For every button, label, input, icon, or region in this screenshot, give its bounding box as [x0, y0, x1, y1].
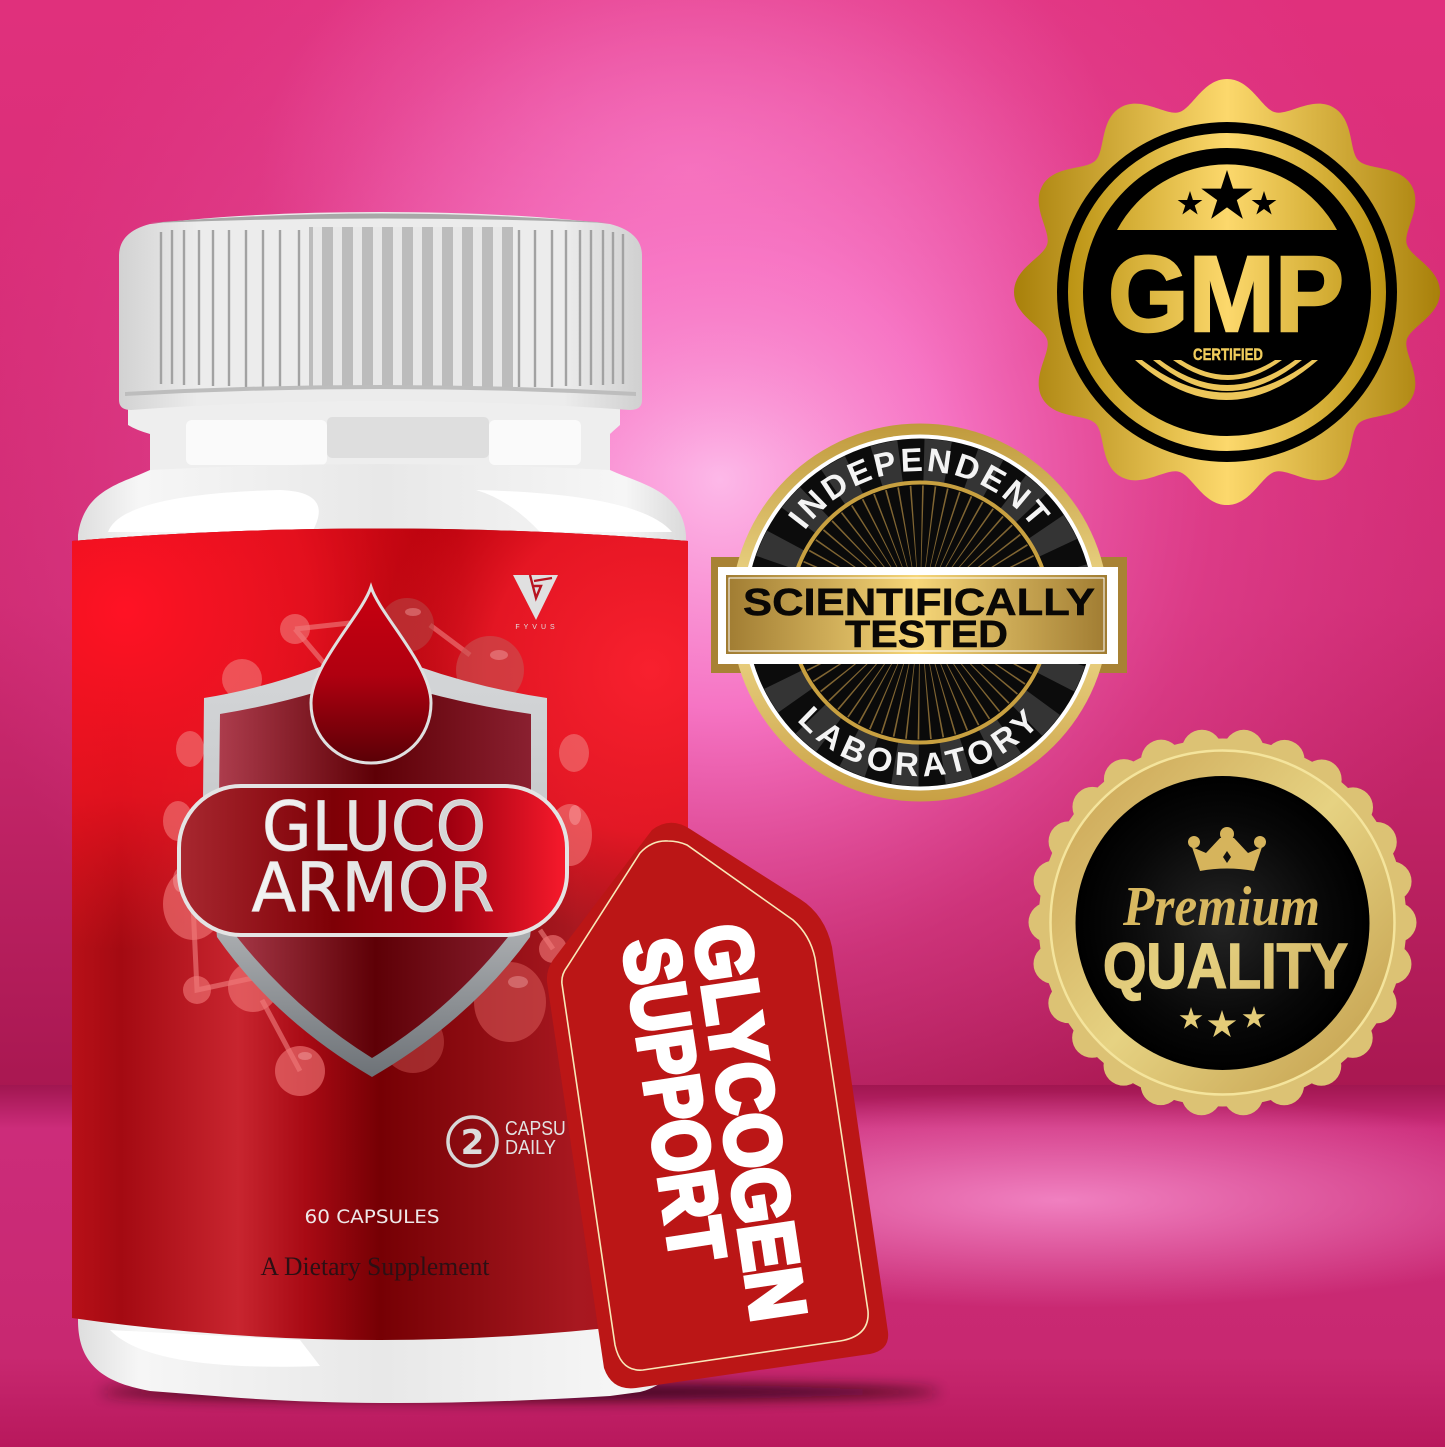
- premium script: Premium: [1122, 876, 1320, 938]
- bottle shadow: [100, 1384, 940, 1400]
- shield emblem: [203, 667, 547, 1077]
- bottle cap: [119, 212, 642, 410]
- badge: premium quality: [1038, 738, 1406, 1106]
- brand name pill: [179, 786, 567, 935]
- certified label: CERTIFIED: [1193, 345, 1263, 364]
- ribbon back: [711, 557, 1127, 673]
- seal center: [790, 482, 1050, 742]
- scalloped gold edge: [1014, 79, 1440, 505]
- background: pink studio wall: [0, 0, 1445, 1100]
- logo: Fyvus: FYVUS: [515, 624, 559, 631]
- badge: GMP certified: [1014, 79, 1440, 505]
- seal disc: [731, 424, 1109, 802]
- bottle body: [78, 464, 686, 1403]
- quality wordmark: QUALITY: [1103, 930, 1348, 1002]
- scalloped edge: [1048, 748, 1396, 1096]
- dietary supplement line: A Dietary Supplement: [260, 1252, 490, 1281]
- ribbon text: SCIENTIFICALLY: [743, 582, 1095, 624]
- dosage: 2 capsules daily: DAILY: [505, 1137, 556, 1159]
- blood drop: [311, 587, 431, 763]
- icon: crown: [1188, 827, 1266, 871]
- laboratory: LABORATORY: [798, 706, 1034, 776]
- GMP wordmark: GMP: [1108, 233, 1344, 354]
- ribbon front: [718, 567, 1118, 664]
- independent: INDEPENDENT: [788, 448, 1051, 529]
- dosage: 2 capsules daily: [446, 1115, 564, 1168]
- hang tag: glycogen support: SUPPORT: [606, 932, 742, 1267]
- badge: scientifically tested: TESTED: [845, 614, 1008, 656]
- black center: [1076, 776, 1370, 1070]
- arch with stars: [1117, 164, 1337, 230]
- stars: [1180, 1006, 1265, 1037]
- hang tag: glycogen support: [547, 823, 888, 1388]
- bottle neck: [128, 395, 620, 480]
- logo: Fyvus: [513, 575, 559, 631]
- seal ring segments: [768, 460, 1072, 764]
- capsule count: 60 CAPSULES: [304, 1206, 440, 1228]
- dosage: 2 capsules daily: CAPSULES: [505, 1118, 599, 1140]
- product bottle: [72, 212, 688, 1403]
- brand name pill: ARMOR: [252, 849, 494, 928]
- tag text: GLYCOGEN: [677, 919, 823, 1326]
- gold ring: [1050, 750, 1394, 1094]
- curved lines: [1135, 360, 1318, 400]
- background: studio floor: [0, 1085, 1445, 1447]
- red label: [72, 528, 688, 1340]
- brand name: GLUCO: [262, 788, 486, 867]
- badge: scientifically tested: [711, 424, 1127, 802]
- molecule graphic: [163, 598, 592, 1096]
- dosage: 2 capsules daily: 2: [461, 1123, 484, 1163]
